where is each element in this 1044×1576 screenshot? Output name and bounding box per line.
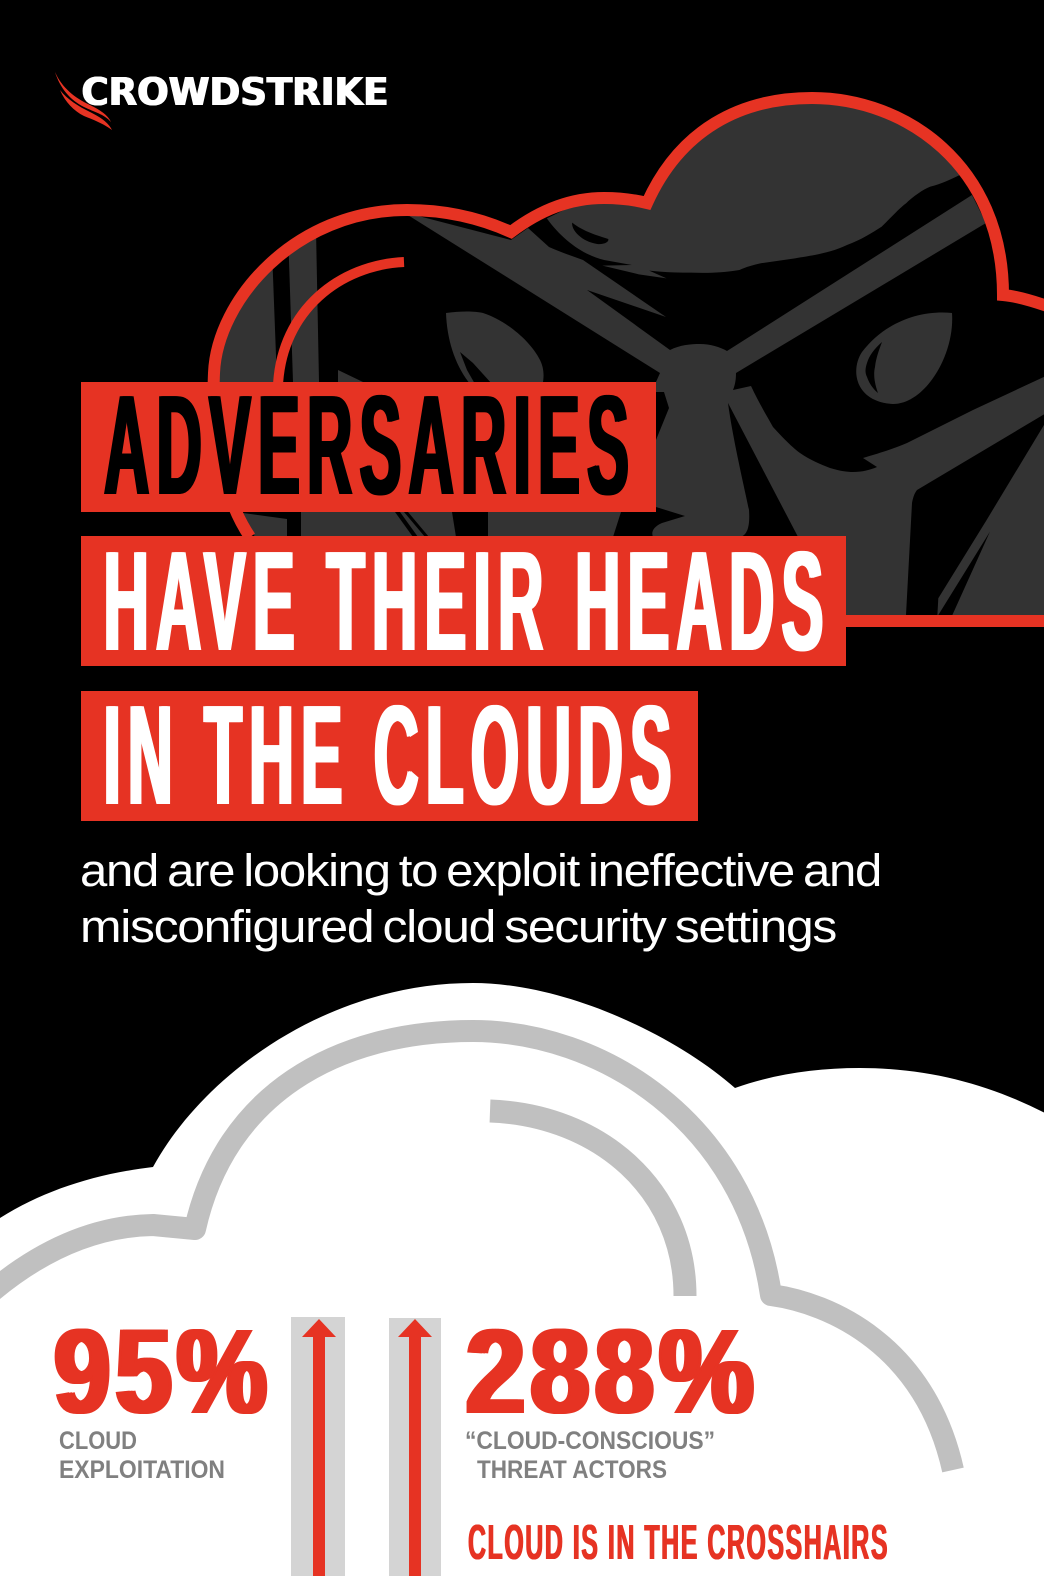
subtitle <box>80 845 881 952</box>
grey inner arc <box>490 1111 685 1296</box>
red inner arc <box>278 262 404 385</box>
stat caption: EXPLOITATION <box>59 1456 225 1484</box>
subtitle: and are looking to exploit ineffective and <box>80 845 881 896</box>
brow slit <box>572 223 608 244</box>
logo: CrowdStrike <box>55 70 388 130</box>
head dome <box>547 104 960 278</box>
adversary face silhouette <box>200 73 1044 621</box>
heading: Adversaries have their heads in the clouds <box>81 366 846 835</box>
white cloud panel <box>0 983 1044 1576</box>
stat caption: THREAT ACTORS <box>477 1456 667 1484</box>
stat caption <box>59 1427 225 1484</box>
stat caption <box>465 1427 715 1484</box>
logo wordmark: CROWDSTRIKE <box>82 70 388 115</box>
stat number: 288% <box>466 1303 759 1439</box>
black wedge beside nose <box>656 392 669 440</box>
right eye <box>856 313 952 404</box>
stat: 95% cloud exploitation <box>54 1303 272 1484</box>
left strips <box>200 230 621 537</box>
red cloud outline <box>214 98 1044 537</box>
icon: falcon swooshes <box>55 72 112 130</box>
grey cloud outline <box>0 1031 953 1470</box>
heading line 1 <box>81 366 656 525</box>
arrow: threat actors up <box>389 1318 441 1576</box>
brow band and nose bridge <box>403 195 1044 621</box>
stat caption: CLOUD <box>59 1427 137 1455</box>
subtitle: misconfigured cloud security settings <box>80 901 836 952</box>
illustration: adversary face inside red cloud outline <box>200 73 1044 627</box>
stat caption: “CLOUD-CONSCIOUS” <box>465 1427 715 1455</box>
lower right shoulder <box>937 425 1044 615</box>
left eye <box>446 312 544 384</box>
arrow: cloud exploitation up <box>291 1317 345 1576</box>
red cloud base line <box>840 615 1044 627</box>
stat: 288% cloud-conscious threat actors <box>465 1303 759 1484</box>
stat number: 95% <box>54 1303 272 1439</box>
heading line 3 <box>81 676 698 835</box>
